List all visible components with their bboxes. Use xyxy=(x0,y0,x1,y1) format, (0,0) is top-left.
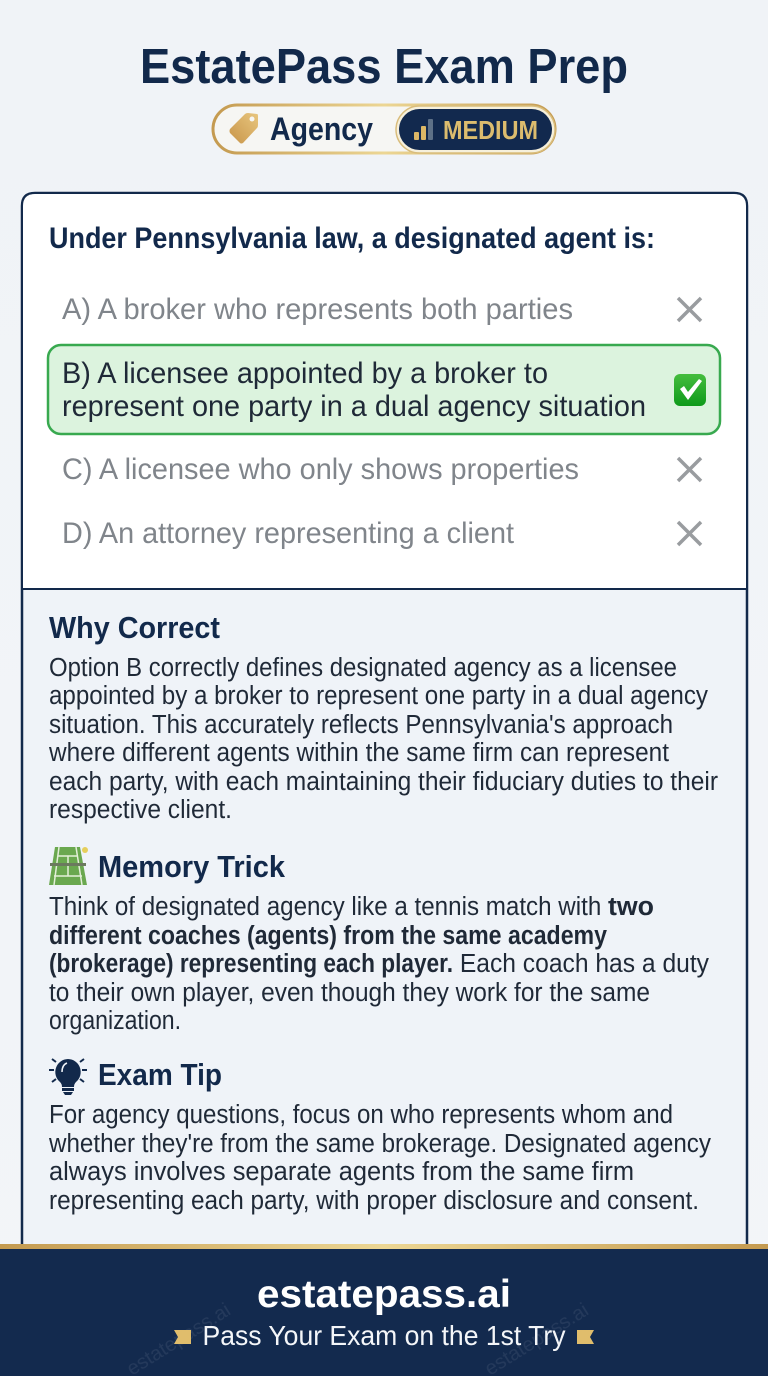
icon: cross xyxy=(678,458,701,481)
footer xyxy=(0,1244,768,1376)
explanation text: respective client. xyxy=(49,796,232,824)
explanation text: where different agents within the same firm can represent xyxy=(48,739,669,767)
icon: cross xyxy=(678,522,701,545)
explanation text: Option B correctly defines designated agency as a licensee xyxy=(49,654,677,682)
category label: Agency xyxy=(270,111,373,147)
title: EstatePass Exam Prep xyxy=(140,40,628,94)
explanation text: situation. This accurately reflects Pennsylvania's approach xyxy=(49,711,673,739)
exam tip text: always involves separate agents from the same firm xyxy=(49,1158,634,1186)
option C: C) A licensee who only shows properties xyxy=(62,453,579,486)
exam tip text xyxy=(48,1101,711,1215)
memory trick text: (brokerage) representing each player. Each coach has a duty xyxy=(49,950,709,978)
explanation text: each party, with each maintaining their fiduciary duties to their xyxy=(49,768,718,796)
memory trick text: to their own player, even though they work for the same xyxy=(49,979,650,1007)
option B correct xyxy=(48,345,720,434)
footer tagline: Pass Your Exam on the 1st Try xyxy=(202,1320,566,1351)
memory trick text: Think of designated agency like a tennis match with two xyxy=(49,893,654,921)
option B correct: B) A licensee appointed by a broker to xyxy=(62,357,548,390)
icon: signal bars xyxy=(414,119,433,140)
footer site name: estatepass.ai xyxy=(257,1273,511,1316)
question heading: Under Pennsylvania law, a designated agent is: xyxy=(49,222,655,255)
icon: green check xyxy=(674,374,706,406)
exam tip text: representing each party, with proper disclosure and consent. xyxy=(49,1187,699,1215)
option A: A) A broker who represents both parties xyxy=(62,293,573,326)
heading: Memory Trick xyxy=(98,849,286,884)
memory trick text: different coaches (agents) from the same academy xyxy=(49,922,608,950)
icon: light bulb xyxy=(49,1059,87,1095)
explanation text: appointed by a broker to represent one party in a dual agency xyxy=(49,682,708,710)
heading: Exam Tip xyxy=(98,1057,222,1092)
exam tip text: For agency questions, focus on who represents whom and xyxy=(49,1101,673,1129)
exam tip section xyxy=(48,1057,711,1215)
icon: right ribbon xyxy=(577,1330,594,1344)
difficulty badge xyxy=(396,106,555,153)
difficulty badge: MEDIUM xyxy=(443,115,538,145)
exam tip text: whether they're from the same brokerage. Designated agency xyxy=(48,1130,711,1158)
memory trick section xyxy=(49,847,709,1035)
explanation text xyxy=(48,654,718,824)
category and difficulty pill xyxy=(213,105,555,153)
icon: cross xyxy=(678,298,701,321)
icon: left ribbon xyxy=(174,1330,191,1344)
option D: D) An attorney representing a client xyxy=(62,517,515,550)
why correct section xyxy=(48,610,718,824)
icon: price tag xyxy=(230,113,258,144)
heading: Why Correct xyxy=(49,610,220,645)
memory trick text: organization. xyxy=(49,1007,181,1035)
memory trick text xyxy=(49,893,709,1035)
question card xyxy=(22,193,747,1246)
icon: tennis court xyxy=(49,847,88,885)
option B correct: represent one party in a dual agency situation xyxy=(62,390,646,423)
